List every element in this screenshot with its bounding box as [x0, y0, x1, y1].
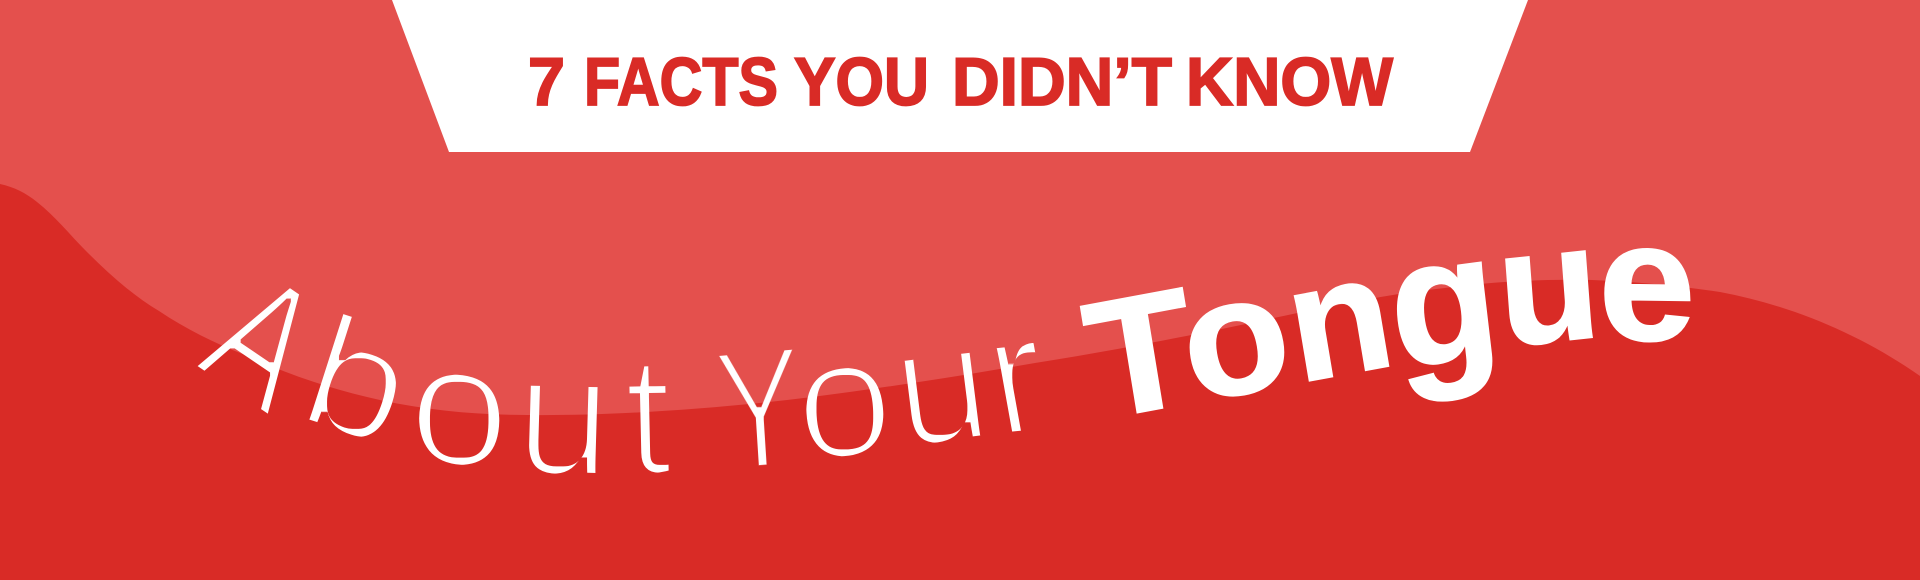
title: Tongue (bold): [1073, 187, 1696, 456]
top banner: [392, 0, 1528, 152]
title: About Your (thin): o: [407, 307, 512, 505]
title: About Your (thin): Y: [710, 311, 808, 506]
banner heading: YOU: [794, 44, 929, 120]
title: About Your (thin): t: [622, 320, 674, 510]
title: Tongue (bold): T: [1073, 253, 1208, 456]
title: About Your (thin): b: [283, 280, 433, 481]
title: Tongue (bold): n: [1274, 219, 1404, 417]
background wave: dark red: [0, 184, 1920, 580]
title: About Your (thin): A: [173, 232, 354, 450]
title: Tongue (bold): g: [1378, 194, 1508, 407]
title: Tongue (bold): u: [1491, 188, 1605, 381]
title: About Your (thin): o: [790, 302, 898, 496]
title: About Your (thin): u: [513, 320, 614, 512]
title: Tongue (bold): o: [1167, 236, 1302, 437]
title: Tongue (bold): e: [1597, 187, 1696, 377]
title: About Your (thin): u: [882, 287, 1000, 483]
banner heading: FACTS: [584, 44, 778, 120]
curved title: [173, 187, 1696, 512]
banner heading: KNOW: [1186, 44, 1394, 120]
title: About Your (thin): [173, 232, 1062, 512]
banner heading: 7: [528, 44, 565, 120]
banner heading: [528, 44, 1394, 120]
title: About Your (thin): r: [970, 279, 1062, 471]
banner heading: DIDN’T: [952, 44, 1172, 120]
